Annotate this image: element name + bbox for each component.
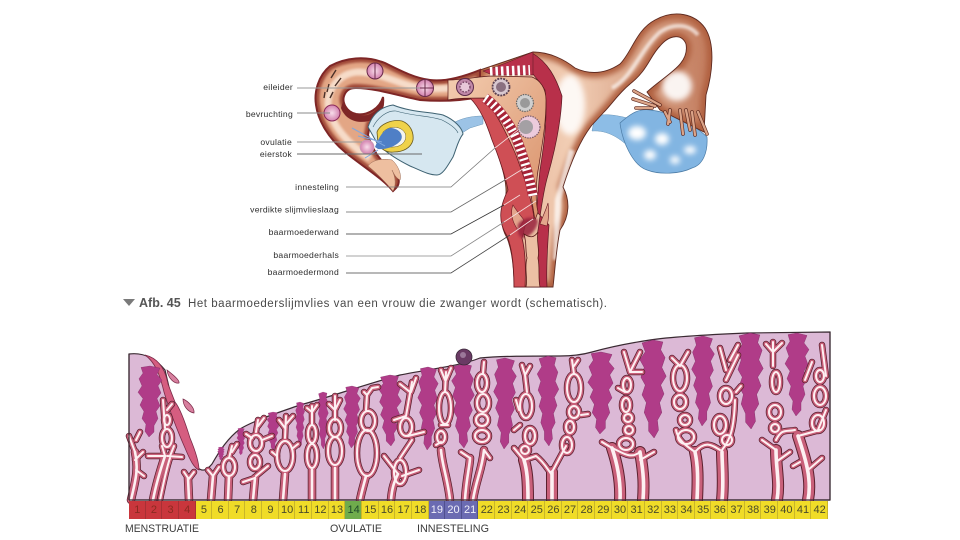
day bar 1-42: 13 — [331, 504, 343, 516]
day bar 1-42: 14 — [348, 504, 360, 516]
uterine cavity — [448, 76, 546, 220]
tissue layer — [129, 332, 830, 500]
day bar 1-42: 8 — [251, 504, 257, 516]
sperm cells — [324, 70, 341, 98]
label: ovulatie — [260, 137, 362, 147]
day bar 1-42: 9 — [267, 504, 274, 516]
day bar 1-42: 29 — [597, 504, 609, 516]
day bar 1-42: 30 — [614, 504, 626, 516]
shedding lining — [145, 355, 199, 470]
phase label: ovulatie: OVULATIE — [330, 523, 382, 535]
day bar 1-42: 7 — [234, 504, 240, 516]
glands — [129, 342, 826, 500]
phase label: menstruatie: MENSTRUATIE — [125, 523, 199, 535]
day bar 1-42: 28 — [581, 504, 593, 516]
day bar 1-42: 32 — [647, 504, 659, 516]
day bar 1-42: 4 — [184, 504, 190, 516]
left ovary — [368, 105, 463, 175]
left uterus wall — [470, 98, 534, 287]
uterus illustration — [316, 14, 712, 287]
left fimbriae — [368, 159, 401, 191]
top lining folds — [490, 70, 530, 72]
detached tissue fragments — [167, 370, 194, 413]
day bar 1-42: 18 — [414, 504, 426, 516]
top red lining — [483, 52, 533, 75]
day bar 1-42: 35 — [697, 504, 709, 516]
right ovary — [620, 110, 707, 173]
label: ovulatie: ovulatie — [260, 137, 292, 147]
day bar 1-42: 26 — [547, 504, 560, 516]
day bar 1-42: 17 — [397, 504, 410, 516]
embryo at implantation — [456, 349, 472, 365]
day bar 1-42 — [129, 501, 828, 519]
label: innesteling — [295, 130, 518, 192]
day bar 1-42: 15 — [364, 504, 376, 516]
cells travelling through the tube — [324, 63, 540, 154]
label: bevruchting: bevruchting — [246, 109, 293, 119]
right fimbriae — [633, 91, 707, 135]
section frame — [129, 332, 830, 500]
label: bevruchting — [246, 109, 330, 119]
caption marker triangle — [123, 299, 135, 306]
phase label: innesteling: INNESTELING — [417, 523, 489, 535]
label: eierstok: eierstok — [260, 149, 292, 159]
label: innesteling: innesteling — [295, 182, 339, 192]
caption: Het baarmoederslijmvlies van een vrouw die zwanger wordt (schematisch). — [188, 298, 607, 310]
hook of the tube — [341, 97, 384, 122]
label: baarmoedermond — [268, 219, 533, 277]
day bar 1-42: 36 — [714, 504, 726, 516]
caption: Afb. 45 — [139, 296, 181, 310]
day bar 1-42: 16 — [381, 504, 393, 516]
day bar 1-42: 6 — [217, 504, 224, 516]
purple lining fronds — [138, 333, 809, 460]
day bar 1-42: 21 — [464, 504, 476, 516]
left fallopian tube — [316, 58, 480, 191]
day bar 1-42: 12 — [314, 504, 326, 516]
thickened lining folds — [485, 98, 533, 196]
day bar 1-42: 37 — [730, 504, 743, 516]
day bar 1-42: 34 — [680, 504, 693, 516]
label: baarmoederhals — [273, 201, 536, 260]
day bar 1-42: 23 — [497, 504, 510, 516]
day bar 1-42: 24 — [514, 504, 526, 516]
day bar 1-42: 31 — [630, 504, 643, 516]
day bar 1-42: 19 — [431, 504, 443, 516]
endometrium cross-section chart — [129, 332, 830, 500]
day bar 1-42: 42 — [814, 504, 826, 516]
day bar 1-42: 11 — [298, 504, 309, 516]
day bar 1-42: 10 — [281, 504, 293, 516]
day bar 1-42: 22 — [481, 504, 493, 516]
left ovary ligament — [455, 116, 483, 133]
right ovary ligament — [592, 115, 632, 150]
day bar 1-42: 39 — [764, 504, 776, 516]
follicle — [352, 121, 413, 158]
label: baarmoederhals: baarmoederhals — [273, 250, 339, 260]
day bar 1-42: 27 — [564, 504, 576, 516]
day bar 1-42: 5 — [201, 504, 207, 516]
day bar 1-42: 40 — [780, 504, 792, 516]
cervix — [512, 203, 549, 287]
label: baarmoederwand — [269, 195, 520, 237]
label: verdikte slijmvlieslaag — [250, 167, 526, 214]
label: verdikte slijmvlieslaag: verdikte slijmvlieslaag — [250, 204, 339, 214]
day bar 1-42: 25 — [531, 504, 543, 516]
day bar 1-42: 33 — [664, 504, 676, 516]
right uterus wall — [531, 53, 562, 287]
day bar 1-42: 20 — [447, 504, 460, 516]
day bar 1-42: 2 — [151, 504, 157, 516]
right fallopian tube and uterus body — [478, 14, 712, 287]
day bar 1-42: 1 — [134, 504, 140, 516]
day bar 1-42: 38 — [747, 504, 759, 516]
label: baarmoederwand: baarmoederwand — [269, 227, 339, 237]
label: eileider: eileider — [263, 82, 293, 92]
day bar 1-42: 3 — [168, 504, 174, 516]
day bar 1-42: 41 — [797, 504, 809, 516]
label: baarmoedermond: baarmoedermond — [268, 267, 339, 277]
